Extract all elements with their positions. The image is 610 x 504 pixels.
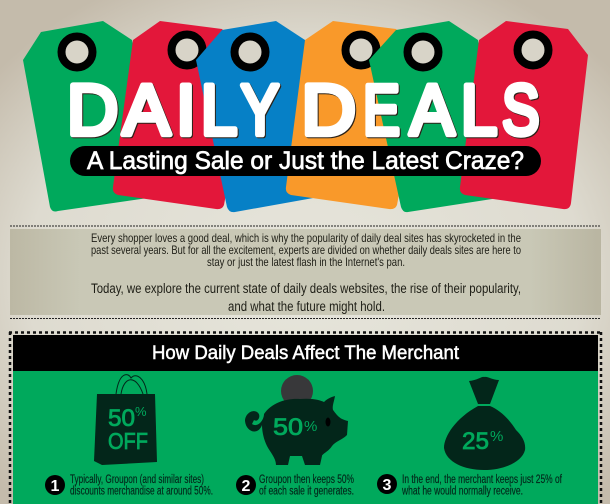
tag: red right [460,21,588,209]
title: Daily Deals: E [363,71,400,150]
step 2: 2 [242,478,251,495]
icon: money bag 25% [444,377,525,470]
step 3: what he would normally receive. [401,486,523,498]
icon: shopping bag 50% off: % [135,404,147,419]
title: Daily Deals: S [502,71,540,150]
icon: piggy bank 50%: 50 [273,414,303,441]
step 1: 1 [51,478,60,495]
step 3: 3 [383,477,392,494]
title: Daily Deals: Y [241,71,279,150]
panel: intro: stay or just the latest flash in the Internet's pan. [207,255,405,269]
title: Daily Deals: D [67,71,118,150]
step 2 [236,474,354,498]
tag: red left [113,21,250,209]
panel: merchant section [9,332,602,504]
icon: money bag 25%: 25 [462,428,489,455]
title: Daily Deals: D [302,71,356,150]
title: Daily Deals: L [461,71,497,150]
icon: piggy bank 50%: % [304,418,317,435]
icon: piggy bank 50% [245,375,348,465]
step 2: Groupon then keeps 50% [259,474,354,486]
icon: shopping bag 50% off: 50 [108,405,135,432]
panel: intro: Today, we explore the current state of daily deals websites, the rise of their popularity, [91,281,521,296]
step 1: Typically, Groupon (and similar sites) [70,474,204,486]
icon: money bag 25%: % [490,428,503,445]
icon: shopping bag 50% off [94,375,157,465]
panel: intro [10,226,601,318]
step 2: of each sale it generates. [259,486,354,498]
icon: shopping bag 50% off: OFF [108,428,148,454]
title: Daily Deals [67,71,540,150]
title: Daily Deals: I [176,71,196,150]
title: Daily Deals: A [123,71,171,150]
tag: green right [369,21,505,212]
step 1 [45,474,213,498]
tag: blue [196,21,330,212]
title: Daily Deals: A [410,71,455,150]
step 1: discounts merchandise at around 50%. [70,486,213,498]
section heading: How Daily Deals Affect The Merchant [152,343,460,364]
step 3 [377,474,563,498]
panel: intro: and what the future might hold. [228,299,385,314]
tag: orange [286,21,424,209]
title: Daily Deals: L [201,71,237,150]
tag: green left [23,21,162,212]
subtitle pill: A Lasting Sale or Just the Latest Craze? [87,147,524,175]
